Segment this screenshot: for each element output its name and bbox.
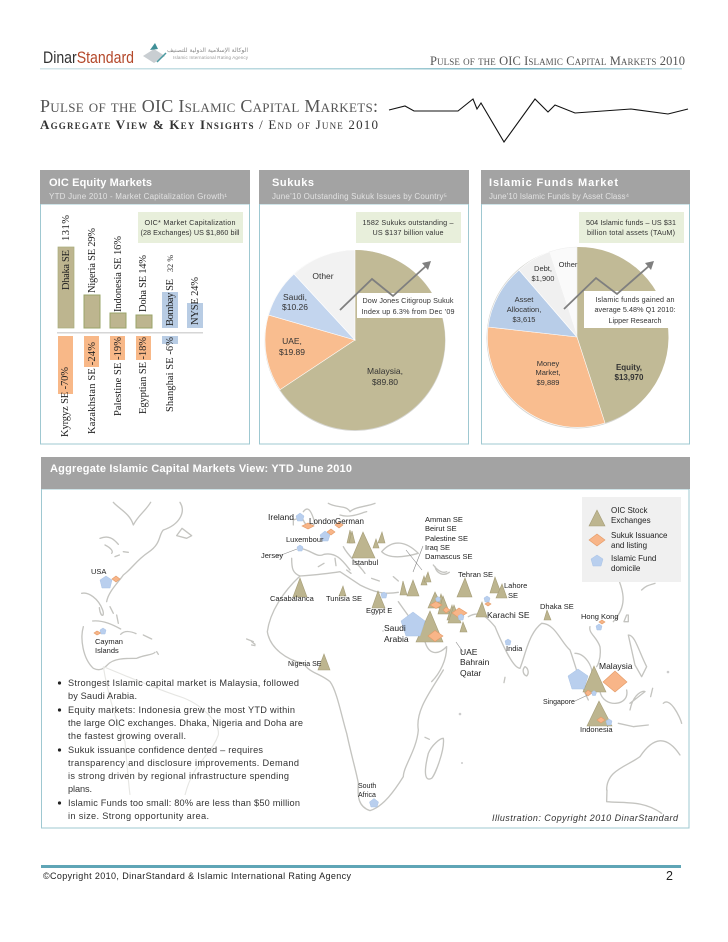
callout: funds total (579, 212, 684, 243)
callout: sukuks outstanding: 1582 Sukuks outstanding – (362, 218, 454, 227)
pulse line (389, 99, 688, 142)
key insights bullet list: the large OIC exchanges. Dhaka, Nigeria and Doha are (68, 718, 303, 728)
pie chart: sukuk issues by country: Malaysia, (367, 366, 403, 376)
bar chart: exchange growth: Kyrgyz SE -70% (60, 367, 71, 437)
logo: agency name: الوكالة الإسلامية الدولية للتصنيف (167, 47, 248, 54)
logo: agency name: Islamic International Rating Agency (173, 55, 249, 60)
map markers: OIC stock exchanges (293, 530, 612, 726)
key insights bullet list: the fastest growing overall. (68, 731, 186, 741)
logo: IIRA emblem (143, 43, 166, 63)
panel: sukuks (259, 170, 469, 444)
subheading: sukuks: June’10 Outstanding Sukuk Issues by Country⁵ (272, 192, 447, 201)
legend: Islamic Fund (611, 554, 656, 563)
footer rule (41, 865, 681, 868)
pie chart: funds by asset class: Equity, (616, 363, 642, 372)
map labels: Tehran SE (458, 570, 493, 579)
key insights bullet list: Islamic Funds too small: 80% are less than $50 million (68, 798, 300, 808)
map labels: Iraq SE (425, 543, 450, 552)
map labels: Nigeria SE (288, 661, 322, 668)
map labels: Beirut SE (425, 524, 457, 533)
key insights bullet list: Sukuk issuance confidence dented – requires (68, 745, 263, 755)
title: Pulse of the OIC Islamic Capital Markets: (40, 96, 378, 116)
heading: sukuks: Sukuks (272, 177, 314, 189)
key insights bullet list: is strong driven by regional infrastructure spending (68, 771, 289, 781)
map labels: Luxembour (286, 535, 324, 544)
callout: sukuks outstanding: US $137 billion value (372, 228, 444, 237)
callout: Lipper research: average 5.48% Q1 2010: (594, 305, 676, 314)
arrow: sukuk index trend (340, 261, 431, 310)
bar chart: exchange growth: Egyptian SE -18% (138, 337, 149, 414)
map labels: Qatar (460, 668, 481, 678)
callout: market capitalization: OIC* Market Capitalization (144, 218, 236, 227)
callout: Dow Jones index: Dow Jones Citigroup Sukuk (362, 296, 454, 305)
map labels: Casabalanca (270, 594, 315, 603)
map labels: Karachi SE (487, 610, 530, 620)
panel: Islamic funds market (481, 170, 690, 444)
bar chart: exchange growth: Bombay SE (165, 279, 176, 326)
map labels: London (309, 517, 336, 526)
legend (582, 497, 681, 582)
pie chart: funds by asset class: $3,615 (513, 315, 535, 324)
pie chart: sukuk issues by country: $19.89 (279, 347, 305, 357)
map labels: Ireland (268, 512, 294, 522)
illustration credit: Illustration: Copyright 2010 DinarStandard (492, 813, 679, 823)
heading: aggregate view: Aggregate Islamic Capital Markets View: YTD June 2010 (50, 463, 352, 475)
key insights bullet list (58, 678, 303, 821)
logo: agency name (167, 47, 249, 60)
map labels: Palestine SE (425, 534, 468, 543)
header: logos (43, 43, 249, 67)
pie chart: sukuk issues by country: $10.26 (282, 302, 308, 312)
callout: market capitalization: (28 Exchanges) US $1,860 bill (140, 228, 240, 237)
pie chart: funds by asset class: $1,900 (532, 274, 554, 283)
map labels: Egypt E (366, 606, 392, 615)
leader lines (276, 546, 590, 701)
pie chart: sukuk issues by country: $89.80 (372, 377, 398, 387)
panel: aggregate Islamic capital markets view (41, 457, 690, 828)
pie chart: funds by asset class: $13,970 (615, 373, 644, 382)
map labels: Islands (95, 646, 119, 655)
bar chart: exchange growth (57, 215, 203, 437)
map labels: Dhaka SE (540, 602, 574, 611)
map labels: Bahrain (460, 657, 490, 667)
legend: Exchanges (611, 516, 651, 525)
map labels: Damascus SE (425, 552, 473, 561)
pie chart: funds by asset class: Debt, (534, 264, 552, 273)
logo: DinarStandard: DinarStandard (43, 48, 134, 67)
pie chart: funds by asset class: Other (559, 260, 578, 269)
legend: domicile (611, 564, 641, 573)
bar chart: exchange growth: NYSE 24% (190, 277, 201, 325)
world map coastlines (82, 502, 682, 813)
map labels: India (506, 644, 523, 653)
map labels: Indonesia (580, 725, 613, 734)
bar chart: exchange growth: 131% (61, 215, 72, 241)
bar chart: exchange growth: Palestine SE -19% (113, 337, 124, 416)
key insights bullet list: in size. Strong opportunity area. (68, 811, 209, 821)
map labels: Istanbul (352, 558, 379, 567)
map labels: Africa (358, 792, 376, 799)
callout: Lipper research (584, 291, 680, 328)
key insights bullet list: by Saudi Arabia. (68, 691, 137, 701)
bar chart: exchange growth: Indonesia SE 16% (113, 236, 124, 312)
subheading: equity: YTD June 2010 - Market Capitalization Growth¹ (49, 192, 227, 201)
arrow: funds trend (564, 261, 654, 309)
bar chart: exchange growth: 32 % (166, 255, 175, 272)
pie chart: sukuk issues by country: Other (312, 271, 334, 281)
bar chart: exchange growth: Nigeria SE 29% (87, 228, 98, 293)
key insights bullet list: transparency and disclosure improvements. Demand (68, 758, 299, 768)
bar chart: exchange growth: Shanghai SE -6% (165, 337, 176, 412)
map labels: Saudi (384, 623, 406, 633)
legend: Sukuk Issuance (611, 531, 668, 540)
map labels: SE (508, 591, 518, 600)
legend: OIC Stock (611, 506, 648, 515)
subtitle: Aggregate View & Key Insights / End of June 2010 (40, 117, 378, 132)
map labels: USA (91, 567, 106, 576)
map labels: Cayman (95, 637, 123, 646)
map labels: Malaysia (599, 661, 633, 671)
map labels: Singapore (543, 699, 575, 706)
pie chart: funds by asset class: Allocation, (507, 305, 541, 314)
callout: Lipper research: Islamic funds gained an (596, 295, 674, 304)
pie chart: funds by asset class: $9,889 (537, 378, 559, 387)
key insights bullet list: plans. (68, 784, 92, 794)
callout: market capitalization (138, 212, 243, 243)
map labels: Hong Kong (581, 612, 619, 621)
callout: funds total: billion total assets (TAuM) (587, 228, 675, 237)
map labels (91, 512, 633, 799)
bar chart: exchange growth: Doha SE 14% (138, 255, 149, 312)
pie chart: sukuk issues by country: UAE, (282, 336, 302, 346)
pie chart: funds by asset class: Market, (535, 368, 561, 377)
callout: funds total: 504 Islamic funds – US $31 (586, 218, 676, 227)
map labels: Jersey (261, 551, 283, 560)
callout: Dow Jones index (357, 293, 459, 318)
map labels: South (358, 783, 376, 790)
map labels: German (335, 517, 364, 526)
bar chart: exchange growth: Dhaka SE (61, 250, 72, 290)
page number: 2 (666, 869, 673, 883)
callout: Dow Jones index: Index up 6.3% from Dec ’09 (362, 307, 454, 316)
map labels: Arabia (384, 634, 409, 644)
header: report name: Pulse of the OIC Islamic Capital Markets 2010 (430, 54, 685, 68)
callout: sukuks outstanding (356, 212, 461, 243)
footer copyright: ©Copyright 2010, DinarStandard & Islamic International Rating Agency (43, 871, 352, 881)
panel: OIC equity markets (40, 170, 250, 444)
subheading: funds: June’10 Islamic Funds by Asset Class⁴ (489, 192, 630, 201)
pie chart: sukuk issues by country (264, 250, 459, 431)
bar chart: exchange growth: Kazakhstan SE -24% (87, 342, 98, 434)
pie chart: funds by asset class (486, 247, 680, 428)
map labels: UAE (460, 647, 478, 657)
map labels: Lahore (504, 581, 527, 590)
heading: equity: OIC Equity Markets (49, 177, 152, 189)
heading: funds: Islamic Funds Market (489, 177, 618, 189)
callout: Lipper research: Lipper Research (608, 316, 662, 325)
key insights bullet list: Equity markets: Indonesia grew the most YTD within (68, 705, 295, 715)
map markers: sukuk issuance (94, 522, 627, 723)
key insights bullet list: Strongest Islamic capital market is Malaysia, followed (68, 678, 299, 688)
pie chart: funds by asset class: Money (537, 359, 560, 368)
map labels: Amman SE (425, 515, 463, 524)
legend: and listing (611, 541, 647, 550)
pie chart: sukuk issues by country: Saudi, (283, 292, 307, 302)
map labels: Tunisia SE (326, 594, 362, 603)
pie chart: funds by asset class: Asset (515, 295, 534, 304)
map markers: Islamic fund domiciles (100, 513, 612, 807)
